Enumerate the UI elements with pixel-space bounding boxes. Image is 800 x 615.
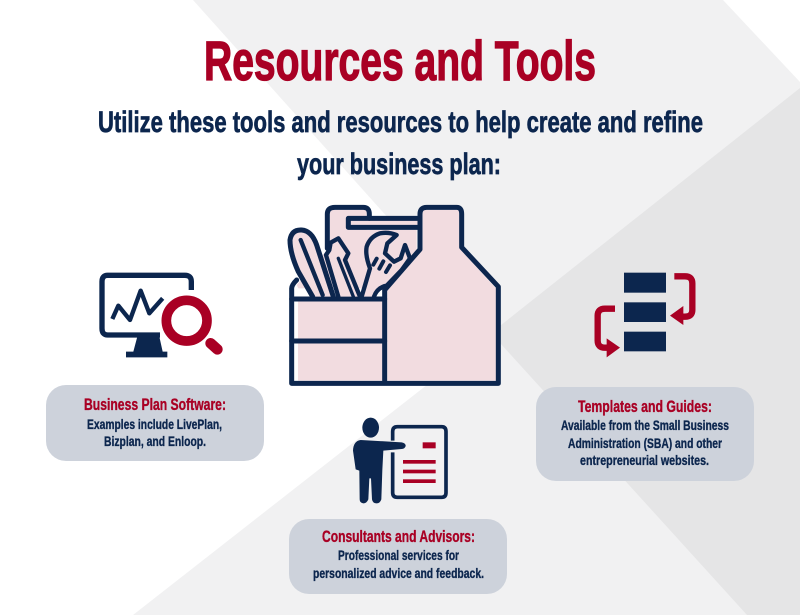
card: templates and guides: Available from the Small Business [561,418,729,433]
card: templates and guides: Templates and Guides: [578,398,712,416]
card: business plan software [46,385,264,461]
icon: advisor presenting document [353,418,446,503]
card: consultants and advisors [289,519,507,594]
title: Resources and Tools [204,29,596,92]
card: business plan software: Examples include LivePlan, [87,417,222,432]
icon: toolbox [290,207,498,383]
card: business plan software: Bizplan, and Enloop. [104,434,206,449]
card: templates and guides: entrepreneurial websites. [580,453,709,468]
card: templates and guides [536,387,754,481]
icon: monitor with magnifier [102,275,217,357]
icon: document list with arrows [598,273,692,357]
card: consultants and advisors: personalized advice and feedback. [313,566,484,581]
card: templates and guides: Administration (SBA) and other [568,436,723,451]
card: consultants and advisors: Professional services for [338,548,460,563]
card: consultants and advisors: Consultants and Advisors: [322,528,475,546]
subtitle: your business plan: [297,148,501,181]
subtitle [98,106,703,181]
card: business plan software: Business Plan Software: [84,396,226,414]
